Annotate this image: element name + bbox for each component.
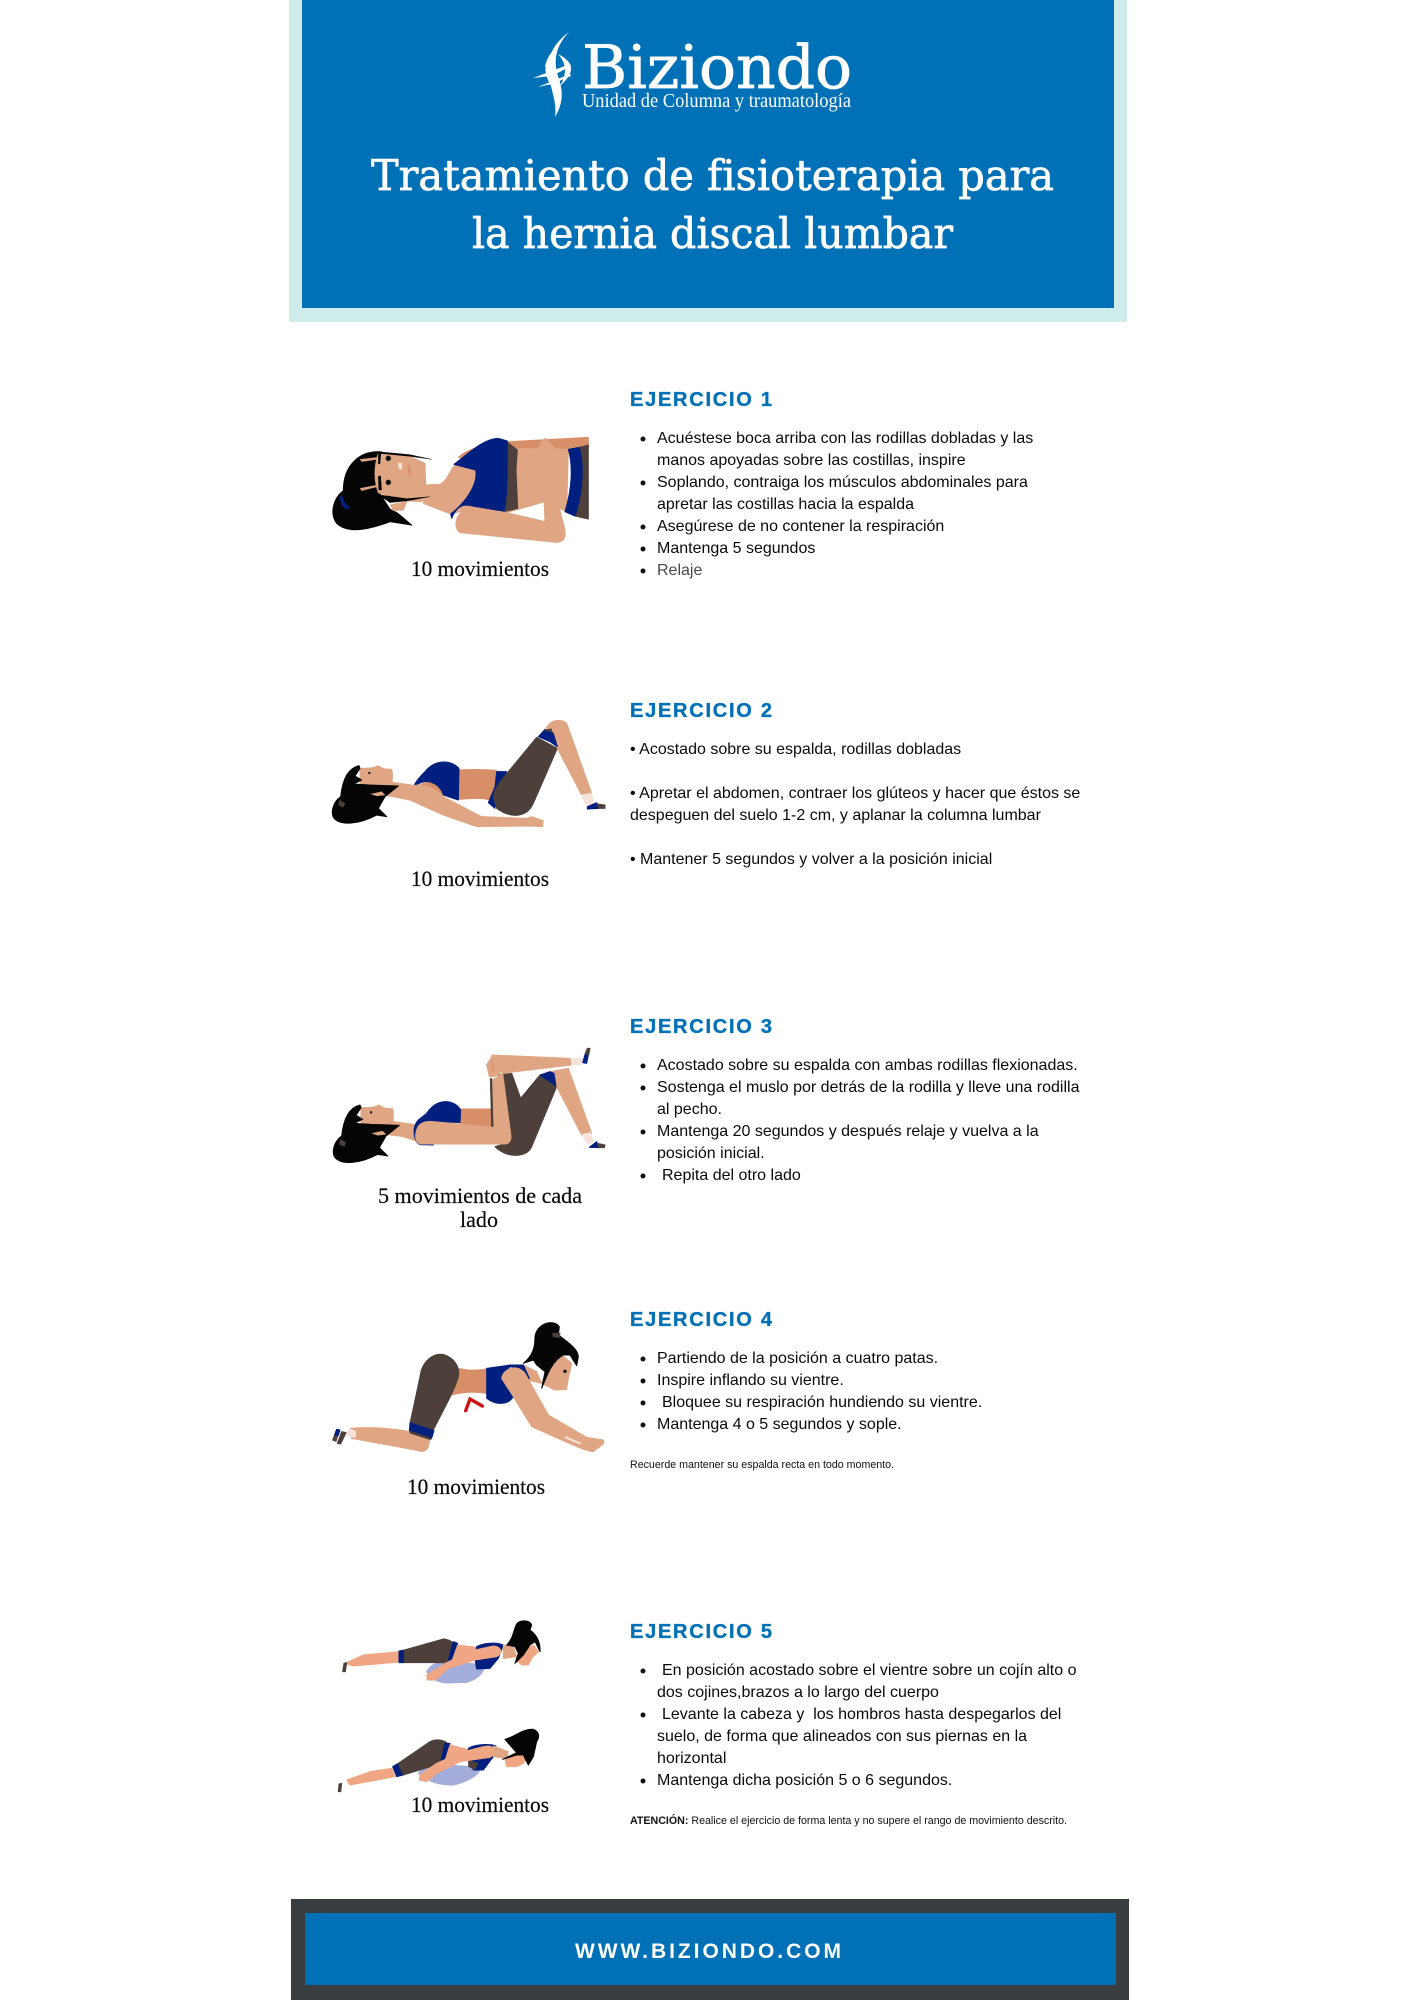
instructions list: Bloquee su respiración hundiendo su vientre. (662, 1394, 982, 1411)
icon: spine logo (533, 32, 571, 117)
instructions list: Acostado sobre su espalda con ambas rodillas flexionadas. (657, 1057, 1078, 1074)
instructions list: Asegúrese de no contener la respiración (657, 518, 944, 535)
instructions list: Levante la cabeza y los hombros hasta despegarlos del (662, 1706, 1061, 1723)
title (371, 151, 1054, 258)
instructions text (630, 741, 1080, 868)
instructions list (640, 1057, 1080, 1184)
instructions text: despeguen del suelo 1-2 cm, y aplanar la columna lumbar (630, 807, 1042, 824)
heading: EJERCICIO 4 (630, 1309, 773, 1331)
illustration: trunk lift on cushion (338, 1621, 540, 1792)
illustration: four-point kneeling (333, 1323, 604, 1452)
instructions list: Relaje (657, 562, 702, 579)
website url: WWW.BIZIONDO.COM (575, 1940, 841, 1963)
caption: lado (460, 1207, 498, 1232)
caption (378, 1183, 582, 1232)
footer panel (291, 1899, 1129, 2000)
instructions list: Acuéstese boca arriba con las rodillas dobladas y las (657, 430, 1033, 447)
instructions list: En posición acostado sobre el vientre sobre un cojín alto o (662, 1662, 1077, 1679)
instructions list: posición inicial. (657, 1145, 765, 1162)
logo wordmark: Biziondo (582, 33, 852, 103)
instructions list: Repita del otro lado (662, 1167, 801, 1184)
caption: 10 movimientos (411, 556, 549, 581)
instructions text: • Acostado sobre su espalda, rodillas dobladas (630, 741, 961, 758)
instructions list: manos apoyadas sobre las costillas, inspire (657, 452, 966, 469)
instructions list: Mantenga 5 segundos (657, 540, 815, 557)
illustration: knee to chest (333, 1048, 605, 1162)
illustration: lying with hands on ribs (333, 437, 588, 542)
title: la hernia discal lumbar (472, 209, 954, 258)
instructions list (640, 430, 1033, 579)
figure: resting position (343, 1621, 540, 1683)
header panel (289, 0, 1127, 322)
panel: ejercicio 5 (338, 1621, 1077, 1827)
heading: EJERCICIO 3 (630, 1016, 772, 1038)
warning note: ATENCIÓN: Realice el ejercicio de forma lenta y no supere el rango de movimiento descrito. (630, 1814, 1067, 1827)
instructions list (640, 1350, 982, 1433)
instructions list: apretar las costillas hacia la espalda (657, 496, 914, 513)
panel: ejercicio 3 (333, 1016, 1080, 1232)
instructions list: Soplando, contraiga los músculos abdominales para (657, 474, 1028, 491)
instructions list: suelo, de forma que alineados con sus piernas en la (657, 1728, 1027, 1745)
figure: lifted position (338, 1729, 539, 1792)
instructions list: Mantenga dicha posición 5 o 6 segundos. (657, 1772, 952, 1789)
title: Tratamiento de fisioterapia para (371, 151, 1054, 200)
caption: 10 movimientos (411, 1792, 549, 1817)
illustration: pelvic lift (332, 720, 605, 827)
caption: 5 movimientos de cada (378, 1183, 582, 1208)
instructions list: Mantenga 20 segundos y después relaje y vuelva a la (657, 1123, 1039, 1140)
logo tagline: Unidad de Columna y traumatología (582, 90, 851, 112)
instructions text: • Mantener 5 segundos y volver a la posición inicial (630, 851, 992, 868)
heading: EJERCICIO 1 (630, 389, 772, 411)
instructions list: Sostenga el muslo por detrás de la rodilla y lleve una rodilla (657, 1079, 1080, 1096)
panel: ejercicio 2 (332, 700, 1080, 891)
instructions list: horizontal (657, 1750, 726, 1767)
caption: 10 movimientos (407, 1474, 545, 1499)
heading: EJERCICIO 5 (630, 1621, 772, 1643)
heading: EJERCICIO 2 (630, 700, 772, 722)
panel: ejercicio 1 (333, 389, 1033, 581)
instructions list: dos cojines,brazos a lo largo del cuerpo (657, 1684, 939, 1701)
instructions list: Partiendo de la posición a cuatro patas. (657, 1350, 938, 1367)
instructions list: Inspire inflando su vientre. (657, 1372, 844, 1389)
note: Recuerde mantener su espalda recta en todo momento. (630, 1459, 894, 1471)
instructions list (640, 1662, 1077, 1789)
instructions list: Mantenga 4 o 5 segundos y sople. (657, 1416, 902, 1433)
instructions list: al pecho. (657, 1101, 722, 1118)
caption: 10 movimientos (411, 866, 549, 891)
instructions text: • Apretar el abdomen, contraer los glúteos y hacer que éstos se (630, 785, 1080, 802)
panel: ejercicio 4 (333, 1309, 982, 1499)
